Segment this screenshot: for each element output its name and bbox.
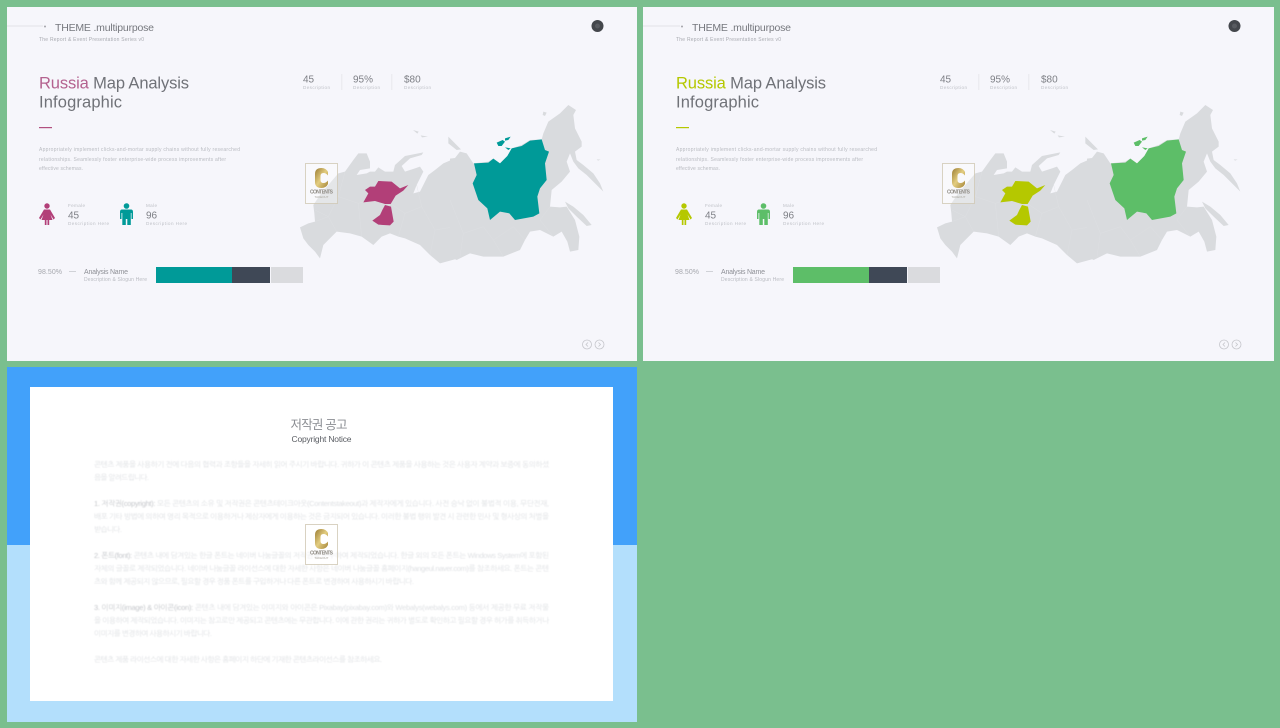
stat: female 45	[68, 203, 109, 226]
logo watermark	[306, 524, 338, 564]
logo watermark	[942, 164, 974, 204]
accent rule	[39, 127, 52, 128]
stat: male 96: Description Here	[146, 221, 187, 226]
text block: description: Appropriately implement clicks-and-mortar supply chains without fully researched	[39, 147, 240, 153]
region: highlighted west	[363, 181, 408, 225]
icon: menu dot	[592, 20, 604, 32]
analysis row label: Description & Slogun Here	[84, 277, 147, 283]
heading: Russia Map Analysis Infographic	[39, 74, 189, 112]
stats row: 95%	[353, 74, 373, 86]
text block: closing note: 콘텐츠 제품 라이선스에 대한 자세한 사항은 홈페이지 하단에 기재한 콘텐츠라이선스를 참조하세요.	[94, 655, 382, 664]
text block: description	[676, 147, 877, 172]
stat: male 96: Description Here	[783, 221, 824, 226]
map west	[300, 152, 458, 263]
map: Russia regions	[937, 105, 1240, 263]
logo watermark: CONTENTS	[310, 190, 334, 196]
text block: clause 2: 자체의 글꼴로 제작되었습니다. 네이버 나눔글꼴 라이선스에 대한 자세한 사항은 네이버 나눔글꼴 홈페이지(hangeul.naver.com)를 참조하세요. 폰트는 콘텐	[94, 564, 549, 573]
heading: Russia Map Analysis Infographic: Russia Map Analysis	[676, 74, 826, 92]
icon: menu dot	[1228, 20, 1240, 32]
stats row: Description	[940, 85, 967, 90]
text block: clause 2: 2. 폰트(font): 콘텐츠 내에 담겨있는 한글 폰트는 네이버 나눔글꼴의 저작권을 준수하여 제작되었습니다. 한글 외의 모든 폰트는 Windows System에 포함된	[94, 551, 549, 560]
icon: female figure	[39, 203, 55, 225]
text block: intro: 콘텐츠 제품을 사용하기 전에 다음의 협력과 조항들을 자세히 읽어 주시기 바랍니다. 귀하가 이 콘텐츠 제품을 사용하는 것은 사용자 계약과 보증에 동의하셨	[94, 460, 549, 469]
analysis row label: 98.50%	[38, 269, 62, 276]
text block: clause 3	[94, 603, 550, 638]
map west	[937, 152, 1095, 263]
text block: description	[39, 147, 240, 172]
header: theme title: The Report & Event Presentation Series v0	[39, 37, 144, 43]
stats row: Description	[353, 85, 380, 90]
heading: Russia Map Analysis Infographic: Infographic	[39, 94, 122, 112]
stats row	[303, 74, 431, 90]
stat: female 45	[705, 203, 746, 226]
nav arrows	[582, 340, 604, 349]
stacked bar	[156, 267, 303, 283]
panel: copyright notice	[7, 367, 637, 722]
accent rule	[676, 127, 689, 128]
region: highlighted east	[1110, 137, 1186, 220]
stat: male 96: 96	[783, 210, 795, 222]
stats row: $80	[404, 74, 421, 86]
logo watermark: TAKEOUT	[315, 556, 329, 560]
logo watermark: CONTENTS	[310, 550, 334, 556]
analysis row label: Analysis Name	[721, 269, 765, 276]
text block: description: effective schemas.	[39, 166, 83, 172]
stats row: Description	[1041, 85, 1068, 90]
header: theme title: The Report & Event Presentation Series v0	[676, 37, 781, 43]
text block: clause 2: 츠와 함께 제공되지 않으므로, 필요할 경우 정품 폰트를 구입하거나 다른 폰트로 변경하여 사용하시기 바랍니다.	[94, 577, 414, 586]
text block: clause 1: 1. 저작권(copyright): 모든 콘텐츠의 소유 및 저작권은 콘텐츠테이크아웃(Contentstakeout)과 제작자에게 있습니다. 사전 승낙 없이 불법적 이용, 무단전재,	[94, 499, 549, 508]
icon: male figure	[120, 203, 133, 225]
text block: intro: 음을 알려드립니다.	[94, 473, 149, 482]
stat: female 45: 45	[68, 210, 80, 222]
analysis row label	[38, 269, 147, 283]
stat: male 96: Male	[783, 203, 794, 208]
icon: female figure	[676, 203, 692, 225]
analysis row label: Analysis Name	[84, 269, 128, 276]
stat: female 45: Female	[705, 203, 722, 208]
stats row: 45	[940, 74, 952, 86]
stat: female 45: 45	[705, 210, 717, 222]
stats row: Description	[990, 85, 1017, 90]
nav arrows	[1220, 340, 1241, 349]
text block: clause 1: 배포 기타 방법에 의하여 영리 목적으로 이용하거나 제삼자에게 이용하는 것은 금지되어 있습니다. 이러한 불법 행위 발견 시 관련한 민사 및 형사상의 처벌을	[94, 512, 549, 521]
header: theme title: THEME .multipurpose	[692, 22, 791, 34]
analysis row label: 98.50%	[675, 269, 699, 276]
panel: lime and green slide	[643, 7, 1274, 361]
heading: Russia Map Analysis Infographic	[676, 74, 826, 112]
text block: description: relationships. Seamlessly foster enterprise-wide process improvements after	[39, 157, 226, 163]
heading: copyright notice	[290, 418, 352, 444]
logo watermark: TAKEOUT	[952, 195, 966, 199]
background bands	[7, 367, 637, 722]
stat: male 96: Male	[146, 203, 157, 208]
text block: clause 3: 이미지를 변경하여 사용하시기 바랍니다.	[94, 629, 212, 638]
stats row: Description	[404, 85, 431, 90]
stats row: 45	[303, 74, 315, 86]
header: theme title: THEME .multipurpose	[55, 22, 154, 34]
heading: Russia Map Analysis Infographic: Russia Map Analysis	[39, 74, 189, 92]
map east	[1050, 105, 1240, 260]
text block: clause 3: 을 이용하여 제작되었습니다. 이미지는 참고로만 제공되고 콘텐츠에는 무관합니다. 이에 관한 권리는 귀하가 별도로 확인하고 필요할 경우 허가를 취득하거나	[94, 616, 550, 625]
header: theme title	[7, 22, 154, 43]
logo watermark: CONTENTS	[947, 190, 971, 196]
logo watermark: TAKEOUT	[315, 195, 329, 199]
analysis row label: Description & Slogun Here	[721, 277, 784, 283]
header: theme title	[643, 22, 791, 43]
heading: Russia Map Analysis Infographic: Infographic	[676, 94, 759, 112]
text block: description: effective schemas.	[676, 166, 720, 172]
heading: copyright notice: Copyright Notice	[292, 434, 352, 444]
text block: clause 3: 3. 이미지(image) & 아이콘(icon): 콘텐츠 내에 담겨있는 이미지와 아이콘은 Pixabay(pixabay.com)와 Webalys(webalys.com) 등에서 제공한 무료 저작물	[94, 603, 549, 612]
stats row: $80	[1041, 74, 1058, 86]
text block: clause 2	[94, 551, 549, 586]
stat: female 45: Description Here	[68, 221, 109, 226]
stat: male 96	[783, 203, 824, 226]
region: highlighted east	[473, 137, 549, 220]
region: highlighted west	[1000, 181, 1045, 225]
stacked bar	[793, 267, 940, 283]
stats row: Description	[303, 85, 330, 90]
icon: male figure	[757, 203, 770, 225]
analysis row label	[675, 269, 784, 283]
map: Russia regions	[300, 105, 603, 263]
stats row	[940, 74, 1068, 90]
text block: intro	[94, 460, 549, 482]
panel: magenta and teal slide	[7, 7, 637, 361]
text block: clause 1: 받습니다.	[94, 525, 122, 534]
stat: male 96	[146, 203, 187, 226]
logo watermark	[306, 164, 338, 204]
stats row: 95%	[990, 74, 1010, 86]
notice card	[30, 387, 613, 701]
text block: description: Appropriately implement clicks-and-mortar supply chains without fully researched	[676, 147, 877, 153]
heading: copyright notice: 저작권 공고	[290, 418, 348, 432]
text block: description: relationships. Seamlessly foster enterprise-wide process improvements after	[676, 157, 863, 163]
map east	[413, 105, 603, 260]
text block: clause 1	[94, 499, 549, 534]
stat: female 45: Female	[68, 203, 85, 208]
stat: male 96: 96	[146, 210, 158, 222]
stat: female 45: Description Here	[705, 221, 746, 226]
